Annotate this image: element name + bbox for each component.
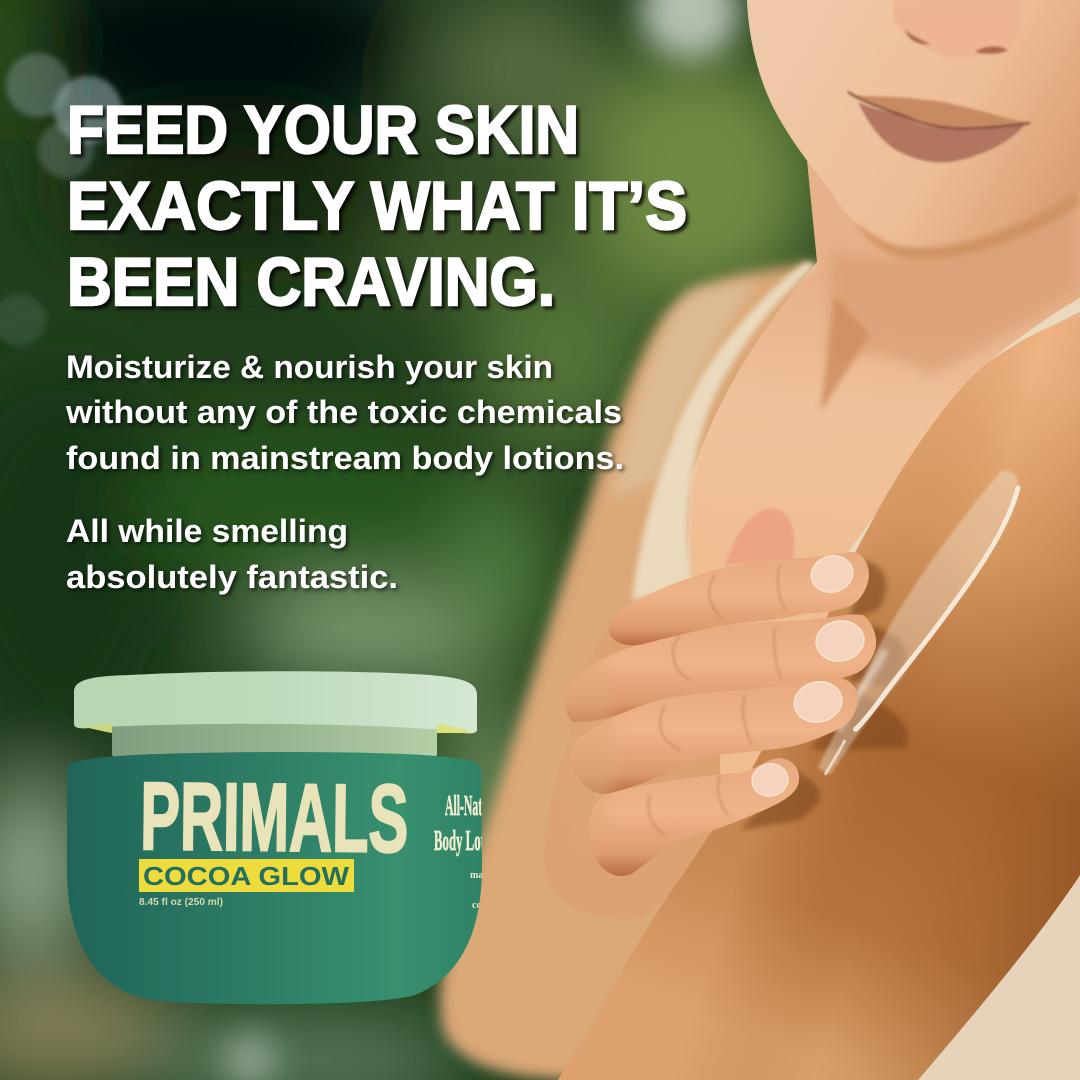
body copy: product benefits — [65, 349, 624, 476]
woman: arm with lotion streak — [558, 317, 1080, 1080]
finger shadows on arm — [740, 560, 908, 830]
brand name: PRIMALS — [140, 763, 409, 873]
body copy: product benefits: Moisturize & nourish your skin — [66, 349, 553, 385]
jar neck — [112, 715, 437, 757]
woman: hand applying lotion — [544, 508, 876, 919]
lotion streak — [818, 471, 1018, 775]
sternal notch shadow — [820, 295, 870, 412]
woman: chest, neck and collarbone — [680, 150, 1080, 800]
nose — [894, 0, 1022, 58]
body copy: product benefits: found in mainstream body lotions. — [66, 440, 624, 476]
body copy: scent line — [66, 513, 398, 595]
woman: cream tank top straps and neckline — [632, 262, 1080, 600]
soft blend of hand into blurred forearm — [555, 635, 615, 855]
side label — [434, 794, 482, 908]
side label: may — [470, 870, 488, 881]
side label: con — [472, 900, 487, 911]
fingernails — [749, 551, 867, 800]
middle finger — [565, 615, 876, 722]
chin shadow — [857, 190, 1080, 259]
product jar: Primals Cocoa Glow — [67, 671, 503, 1004]
text: Body Lotion — [434, 826, 502, 857]
body copy: scent line: absolutely fantastic. — [66, 559, 398, 595]
flavour band: COCOA GLOW — [143, 861, 350, 891]
woman: blurred far shoulder and forearm — [440, 262, 817, 1080]
lips — [848, 92, 1030, 162]
woman: lower face with nose and lips — [747, 0, 1080, 259]
headline — [67, 92, 687, 320]
neck shading — [830, 195, 1080, 375]
jar lid — [74, 671, 477, 733]
knuckle creases — [648, 565, 785, 835]
thumb — [725, 508, 794, 565]
headline: FEED YOUR SKIN — [67, 92, 579, 168]
pinky finger — [589, 758, 799, 876]
headline: EXACTLY WHAT IT’S — [67, 168, 687, 244]
back of hand — [544, 610, 720, 919]
text: All-Natural — [445, 791, 503, 822]
headline: BEEN CRAVING. — [67, 244, 555, 320]
index finger — [609, 553, 869, 645]
body copy: product benefits: without any of the toxic chemicals — [65, 394, 622, 430]
woman: lower-right cream top — [918, 875, 1080, 1080]
jar label text — [139, 782, 482, 908]
net weight: 8.45 fl oz (250 ml) — [139, 897, 223, 908]
background: blurred green foliage — [0, 0, 817, 1080]
jar body — [67, 752, 482, 1004]
body copy: scent line: All while smelling — [66, 513, 348, 549]
ring finger — [571, 678, 858, 794]
